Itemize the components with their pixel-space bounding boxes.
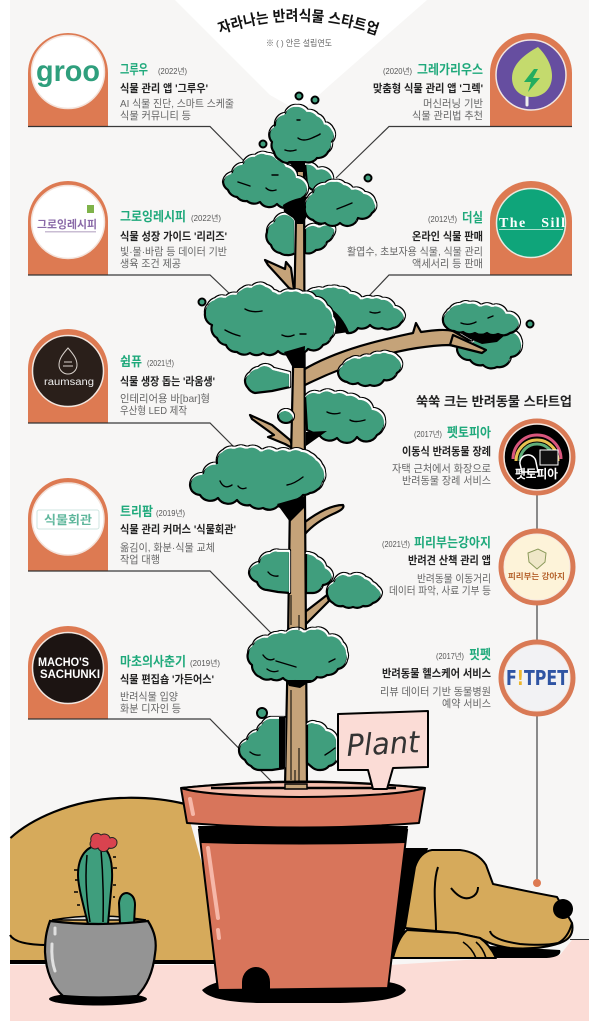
text: trifarm: 트리팜 [120, 504, 153, 519]
foliage: top [269, 105, 335, 164]
dog body [10, 798, 230, 962]
logo text: groo: groo [36, 55, 100, 88]
text: macho's sachunki: 반려식물 입양 [120, 690, 178, 703]
logo text: macho's sachunki: MACHO'S [38, 657, 89, 669]
text: petopia: 반려동물 장례 서비스 [402, 475, 491, 487]
cactus pot [45, 833, 156, 1006]
title: 자라나는 반려식물 스타트업 [217, 8, 380, 36]
foliage: far right shadow [460, 333, 505, 344]
dog neck shadow [385, 848, 428, 958]
tree [190, 92, 533, 787]
floor [10, 940, 589, 1021]
text: the sill: 활엽수, 초보자용 식물, 식물 관리 [347, 245, 483, 258]
text: growing recipe: 생육 조건 제공 [120, 258, 181, 270]
foliage squiggles [220, 120, 493, 755]
foliage: far right upper [443, 301, 520, 335]
trunk [285, 165, 307, 787]
foliage: base left [239, 717, 285, 770]
leader lines [108, 126, 490, 782]
branch: twig lower right [305, 595, 329, 625]
pet: piper puppy [382, 528, 576, 606]
foliage: behind top [305, 162, 333, 191]
text: the sill: 더실 [462, 210, 483, 225]
note: founding year: ※ ( ) 안은 설립연도 [266, 38, 332, 48]
small round leaves [198, 92, 534, 718]
dog eye [451, 887, 478, 898]
dog ear [435, 867, 438, 930]
cactus flower [90, 833, 117, 852]
text: groo [120, 62, 234, 122]
cactus rim inside [52, 916, 146, 920]
dog nose [549, 895, 577, 923]
text: greengarius: 식물 관리법 추천 [412, 110, 483, 122]
text: macho's sachunki: 식물 편집숍 '가든어스' [120, 672, 214, 686]
pot [181, 782, 425, 1003]
foliage: bottom crown [248, 627, 348, 683]
text: greengarius: (2020년) [383, 66, 412, 76]
dog mouth [490, 923, 572, 945]
text: fitpet [380, 647, 491, 710]
foliage: junction shadow top [283, 196, 312, 224]
text: raumsang: 쉼퓨 [120, 354, 142, 369]
text: greengarius: 그레가리우스 [417, 62, 483, 77]
text: petopia: (2017년) [414, 429, 442, 439]
foliage: far right lower [457, 330, 522, 368]
text: piper puppy [382, 535, 491, 597]
text: fitpet: 반려동물 헬스케어 서비스 [382, 666, 491, 680]
card: trifarm [28, 478, 236, 571]
pot highlights [190, 799, 219, 938]
card: the sill [347, 181, 572, 275]
text: groo: AI 식물 진단, 스마트 스케줄 [120, 98, 234, 110]
text: fitpet: (2017년) [436, 651, 464, 661]
text: fitpet: 리뷰 데이터 기반 동물병원 [380, 686, 491, 698]
logo text: raumsang: raumsang [44, 377, 94, 388]
text: the sill [347, 210, 483, 270]
pot door [242, 967, 270, 991]
foliage: upper left [223, 152, 308, 208]
dog paw [393, 930, 496, 958]
section heading: pet startups: 쑥쑥 크는 반려동물 스타트업 [416, 394, 572, 409]
pet: petopia [392, 418, 576, 496]
pot rim inner [181, 782, 425, 797]
foliage: under branch [338, 351, 402, 386]
text: growing recipe: 빛·물·바람 등 데이터 기반 [120, 245, 227, 258]
logo text: macho's sachunki: SACHUNKI [40, 669, 100, 681]
text: greengarius [373, 62, 483, 122]
foliage: lower far right [327, 573, 382, 608]
branch: small upper right [304, 224, 318, 241]
card: macho's sachunki [28, 626, 220, 719]
text: trifarm: (2019년) [156, 508, 185, 518]
text: growing recipe: 식물 성장 가이드 '리리즈' [120, 229, 227, 243]
pot band shadow [198, 826, 408, 844]
foliage: lower left of crown [266, 213, 295, 255]
foliage: middle right [305, 389, 385, 443]
text: raumsang [120, 354, 215, 417]
text: macho's sachunki: (2019년) [190, 658, 220, 668]
timeline line [536, 490, 538, 884]
foliage: small behind trunk [278, 409, 294, 423]
text: greengarius: 머신러닝 기반 [423, 98, 483, 110]
text: raumsang: 인테리어용 바[bar]형 [120, 393, 210, 405]
branch tip over foliage [450, 335, 486, 353]
text: piper puppy: 반려견 산책 관리 앱 [408, 553, 491, 567]
text: piper puppy: (2021년) [382, 539, 410, 549]
text: macho's sachunki: 마초의사춘기 [120, 654, 186, 669]
text: groo: 식물 관리 앱 '그루우' [120, 82, 208, 95]
cactus shadow [49, 992, 147, 1006]
logo text: petopia: 펫토피아 [515, 467, 558, 481]
text: the sill: 온라인 식물 판매 [412, 229, 483, 243]
branch: twig right [305, 505, 343, 534]
foliage: lower right [306, 552, 333, 593]
trunk details [291, 595, 299, 785]
text: fitpet: 핏펫 [469, 647, 491, 662]
cactus pot body [45, 921, 156, 998]
logo text: growing recipe: 그로잉레시피 [37, 217, 97, 231]
cactus ribs [86, 850, 103, 922]
foliage: lower wide crown [190, 445, 325, 510]
sign text: Plant [346, 725, 422, 764]
text: greengarius: 맞춤형 식물 관리 앱 '그렉' [373, 81, 483, 95]
cactus spines [74, 857, 117, 905]
trunk base over rim [285, 784, 307, 789]
cactus pot highlights [52, 928, 55, 971]
text: petopia [392, 425, 491, 487]
pot rim [181, 782, 425, 828]
logo text: piper puppy: 피리부는 강아지 [508, 571, 565, 581]
text: growing recipe: 그로잉레시피 [120, 209, 186, 224]
timeline dot [533, 879, 541, 887]
card: greengarius [373, 33, 572, 126]
icon: leaf with bolt [512, 47, 552, 105]
text: trifarm: 식물 관리 커머스 '식물회관' [120, 522, 236, 536]
dog [10, 798, 577, 962]
dog chin shadow [490, 946, 560, 958]
text: fitpet: 예약 서비스 [442, 697, 491, 710]
logo text: fitpet: F!TPET [506, 666, 568, 690]
icon: dog badge [528, 549, 546, 569]
logo text: macho's sachunki [38, 657, 100, 681]
text: groo: 그루우 [120, 62, 148, 77]
text: raumsang: 식물 생장 돕는 '라움생' [120, 375, 215, 388]
logo text: plant hall: 식물회관 [44, 513, 92, 527]
pot shadow [202, 982, 406, 1003]
icon: drop [59, 348, 77, 374]
foliage: base right [307, 721, 337, 770]
dog paw toes [463, 942, 486, 958]
pot body [199, 830, 407, 990]
branch: twig upper left [265, 260, 294, 290]
foliage: lower left [249, 550, 290, 593]
dog head [405, 850, 572, 948]
foliage: lower right of crown [305, 224, 335, 253]
text: growing recipe: (2022년) [191, 213, 221, 223]
foliage: left small [245, 364, 290, 393]
card: groo [28, 33, 234, 126]
text: piper puppy: 데이터 파악, 사료 기부 등 [389, 585, 491, 597]
foliage: right of big crown [307, 285, 405, 333]
text: macho's sachunki: 화분 디자인 등 [120, 703, 181, 715]
icon: rainbow [513, 435, 561, 461]
branch: twig middle left [250, 415, 294, 449]
branch: large right [303, 323, 486, 386]
text: trifarm: 옮김이, 화분·식물 교체 [120, 542, 215, 554]
text: petopia: 자택 근처에서 화장으로 [392, 463, 491, 475]
text: the sill: (2012년) [428, 214, 457, 224]
text: groo: (2022년) [158, 66, 187, 76]
text: raumsang: (2021년) [147, 358, 174, 368]
text: petopia: 이동식 반려동물 장례 [402, 444, 491, 458]
foliage: upper right [305, 180, 376, 226]
card: growing recipe [28, 181, 227, 275]
text: piper puppy: 피리부는강아지 [414, 535, 491, 550]
text: petopia: 펫토피아 [447, 425, 491, 440]
logo text: the sill: The Sill [499, 216, 565, 231]
card: raumsang [28, 329, 215, 423]
cactus main stem [78, 846, 112, 924]
text: piper puppy: 반려동물 이동거리 [417, 573, 491, 585]
plant sign [338, 711, 428, 789]
cactus arm [119, 893, 135, 924]
text: trifarm [120, 504, 236, 566]
pet: fitpet [380, 640, 576, 716]
text: the sill: 액세서리 등 판매 [412, 258, 483, 270]
text: macho's sachunki [120, 654, 220, 715]
text: groo: 식물 커뮤니티 등 [120, 110, 191, 122]
foliage: big crown [205, 283, 336, 355]
text: growing recipe [120, 209, 227, 270]
text: raumsang: 우산형 LED 제작 [120, 405, 187, 417]
text: trifarm: 작업 대행 [120, 553, 160, 566]
